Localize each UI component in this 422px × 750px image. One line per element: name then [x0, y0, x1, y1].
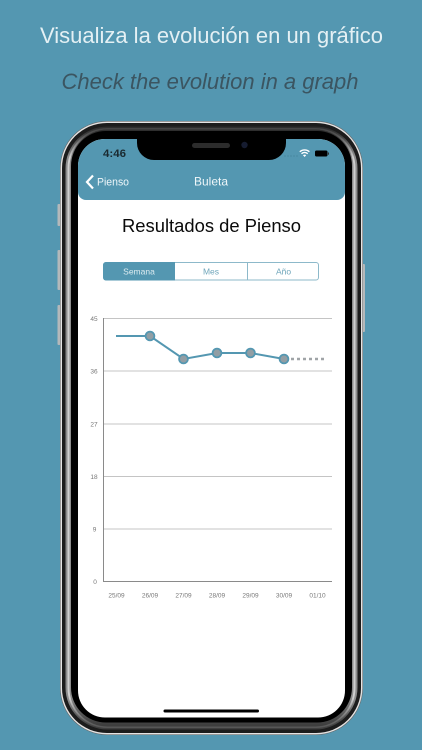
y axis labels: 9 — [93, 526, 97, 534]
phone frame — [60, 121, 363, 735]
status icons — [284, 150, 329, 157]
x axis labels: 27/09 — [175, 592, 192, 600]
back button: Pienso — [97, 176, 129, 188]
y axis labels: 45 — [90, 316, 98, 323]
screen — [78, 139, 345, 718]
x axis labels — [108, 592, 326, 600]
axes — [104, 318, 332, 582]
x axis labels: 26/09 — [142, 592, 159, 600]
phone device — [58, 121, 365, 735]
screen heading: Resultados de Pienso — [122, 215, 301, 236]
back button — [87, 176, 129, 188]
notch — [137, 139, 286, 160]
forecast dotted line — [291, 358, 325, 360]
y axis labels: 27 — [90, 422, 98, 428]
grid lines — [103, 318, 332, 529]
line chart — [90, 316, 332, 600]
side buttons — [58, 204, 365, 345]
segmented control: Mes — [203, 266, 219, 276]
y axis labels: 36 — [90, 368, 98, 376]
y axis labels: 0 — [93, 579, 97, 586]
y axis labels: 18 — [90, 474, 98, 481]
title: Spanish: Visualiza la evolución en un gráfico — [40, 23, 383, 48]
x axis labels: 25/09 — [108, 592, 125, 600]
home indicator — [164, 710, 259, 712]
segmented control — [103, 262, 318, 280]
x axis labels: 01/10 — [309, 592, 326, 600]
data line — [116, 336, 284, 359]
segmented control: Año — [276, 266, 291, 276]
data points — [146, 332, 288, 363]
x axis labels: 29/09 — [242, 592, 259, 600]
navigation bar — [78, 139, 345, 200]
nav title: Buleta — [194, 174, 228, 188]
subtitle: English: Check the evolution in a graph — [62, 69, 358, 94]
y axis labels — [90, 316, 98, 586]
status time: 4:46 — [103, 148, 126, 160]
x axis labels: 28/09 — [209, 592, 226, 600]
segmented control: Semana — [123, 266, 155, 276]
x axis labels: 30/09 — [276, 592, 293, 600]
